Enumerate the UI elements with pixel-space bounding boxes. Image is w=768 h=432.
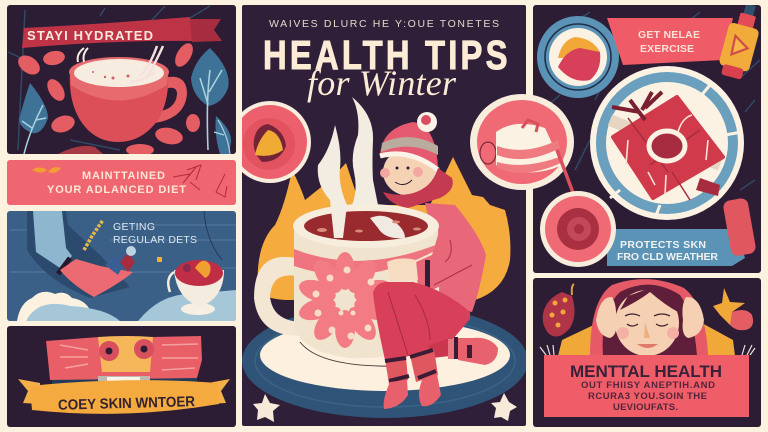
- banner: protects skin: [607, 229, 745, 266]
- icon: stars: [253, 393, 517, 422]
- panel: right top: [530, 1, 765, 273]
- banner: protects skin: FRO CLD WEATHER: [617, 251, 718, 263]
- text box: mental health: RCURA3 YOU.SOIN THE: [588, 391, 707, 402]
- icon: orange leaves: [32, 167, 61, 173]
- icon: sweater torso: [425, 203, 486, 312]
- banner: exercise: GET NELAE: [638, 29, 700, 41]
- icon: big plate: [590, 66, 744, 220]
- icon: soup bowl: [540, 191, 616, 267]
- icon: left plate: [242, 101, 311, 183]
- icon: fruit bowl: [168, 260, 224, 315]
- banner: exercise: [607, 18, 733, 65]
- panel: cozy skin winter: [7, 326, 236, 427]
- text: diet: MAINTTAINED: [82, 170, 165, 182]
- icon: bottle: [720, 5, 758, 80]
- icon: saucer: [260, 327, 510, 391]
- subtitle: for winter: for Winter: [307, 63, 457, 103]
- ribbon: cozy skin: [18, 379, 230, 414]
- text: tagline: WAIVES DLURC HE Y:OUE TONETES: [269, 18, 499, 30]
- panel: regular diets: [7, 211, 240, 321]
- icon: yellow dots: [84, 220, 103, 250]
- icon: blue rug: [242, 315, 526, 418]
- icon: person lying: [27, 211, 136, 298]
- icon: berry: [543, 284, 575, 337]
- panel: stay hydrated: [7, 5, 236, 156]
- icon: woman relaxing: [558, 279, 735, 356]
- banner: stay hydrated: [22, 17, 222, 48]
- panel: mental health: [533, 278, 761, 427]
- icon: red sketches: [173, 165, 227, 197]
- icon: person: [373, 112, 498, 409]
- banner: exercise: EXERCISE: [640, 43, 694, 55]
- banner: protects skin: PROTECTS SKN: [620, 239, 706, 251]
- text box: mental health: [544, 355, 749, 417]
- icon: flames: [258, 157, 510, 300]
- text: regular diets: GETING: [113, 221, 155, 233]
- icon: star and fruit: [713, 288, 753, 330]
- icon: beans and leaves: [15, 40, 231, 156]
- text: diet: YOUR ADLANCED DIET: [47, 184, 186, 196]
- panel: center main: [229, 5, 528, 426]
- icon: steam: [318, 97, 378, 238]
- icon: spoon: [557, 150, 577, 210]
- icon: flower on mug: [296, 252, 394, 348]
- panel: balanced diet: [7, 160, 236, 205]
- title: health tips: HEALTH TIPS: [263, 31, 511, 78]
- icon: red mug: [69, 46, 187, 142]
- icon: scarf with face: [46, 336, 202, 398]
- text box: mental health: MENTTAL HEALTH: [570, 362, 722, 381]
- icon: small plate: [537, 16, 619, 98]
- icon: big mug: [254, 204, 440, 358]
- icon: cake plate: [470, 94, 574, 190]
- text box: mental health: OUT FHIISY ANEPTIH.AND: [581, 380, 715, 391]
- text box: mental health: UEVIOUFATS.: [613, 402, 678, 413]
- icon: red mitt: [722, 197, 757, 257]
- ribbon: cozy skin: COEY SKIN WNTOER: [58, 394, 196, 414]
- icon: white grass: [540, 345, 755, 355]
- banner: stay hydrated: STAYI HYDRATED: [27, 28, 153, 43]
- icon: snow drifts: [17, 290, 236, 321]
- text: regular diets: REGULAR DETS: [113, 234, 197, 246]
